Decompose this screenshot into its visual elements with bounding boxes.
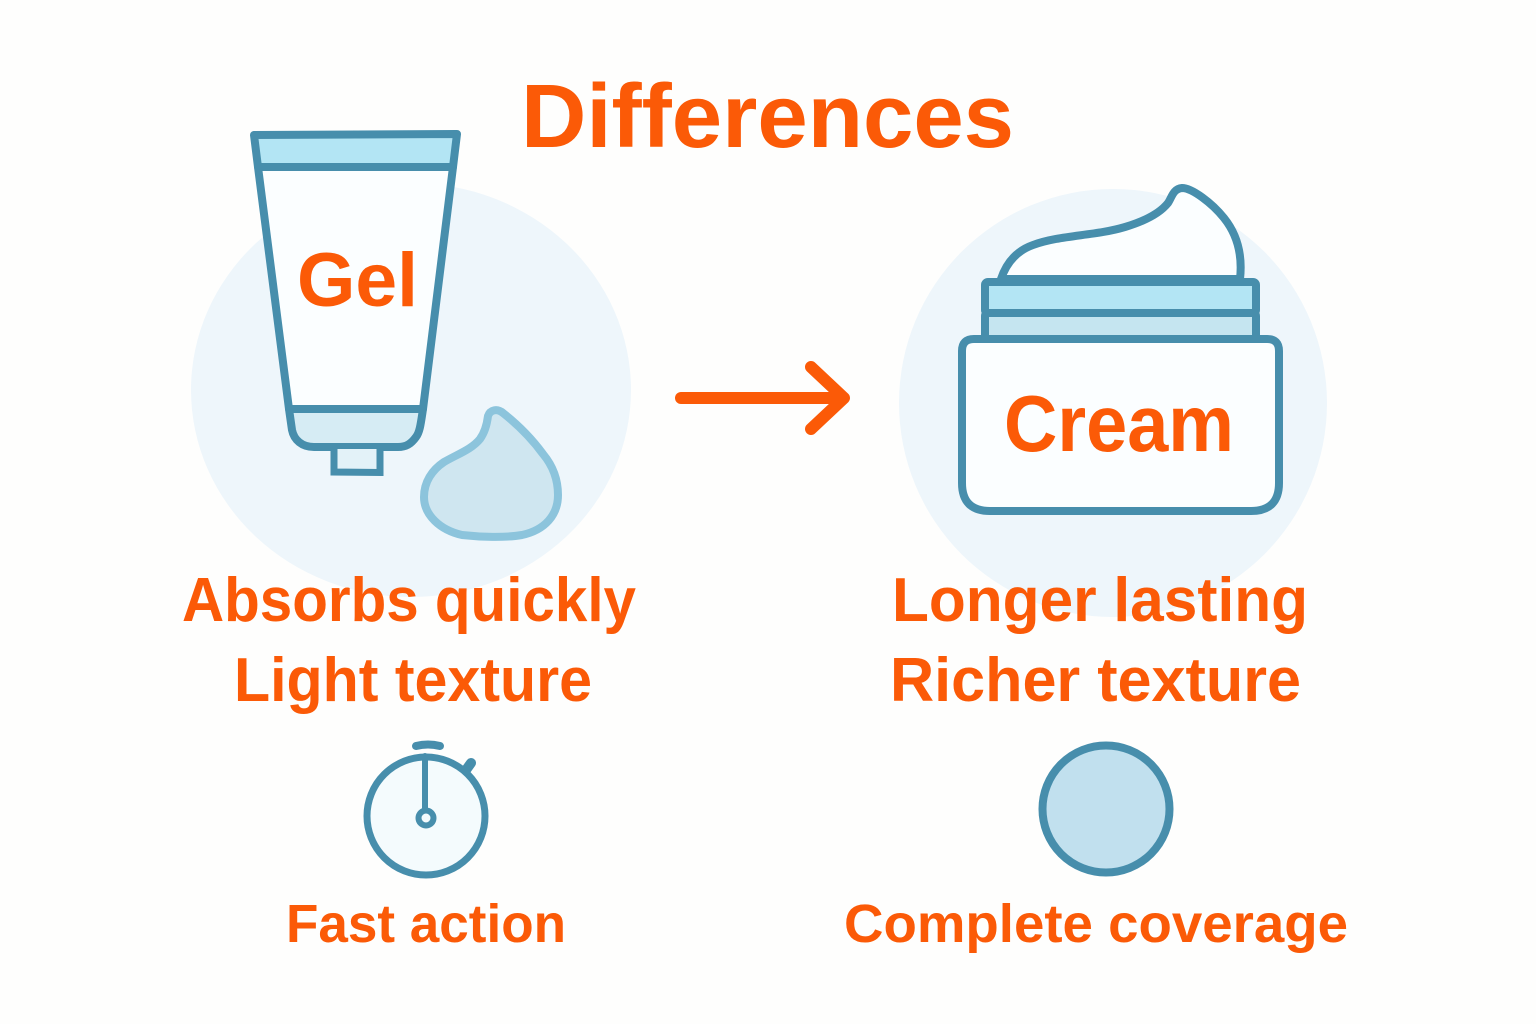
cream benefits: Longer lasting	[892, 566, 1308, 635]
arrow	[681, 367, 844, 429]
gel label: Gel	[297, 238, 418, 323]
panel: cream	[844, 188, 1348, 954]
icon: cream jar	[962, 188, 1279, 511]
icon: coverage circle	[1042, 746, 1170, 872]
cream benefits: Richer texture	[890, 646, 1301, 715]
background circle: cream	[899, 189, 1327, 617]
cream benefits	[890, 566, 1308, 715]
complete coverage label: Complete coverage	[844, 894, 1348, 954]
gel benefits: Light texture	[234, 646, 592, 715]
fast action label: Fast action	[286, 894, 566, 954]
panel: gel	[182, 134, 636, 954]
cream label: Cream	[1004, 379, 1234, 468]
icon: stopwatch	[367, 744, 485, 875]
icon: gel drop	[424, 410, 558, 537]
background circle: gel	[191, 183, 631, 597]
title: Differences	[521, 67, 1014, 167]
gel benefits: Absorbs quickly	[182, 566, 636, 635]
gel benefits	[182, 566, 636, 715]
icon: gel tube	[254, 134, 457, 472]
